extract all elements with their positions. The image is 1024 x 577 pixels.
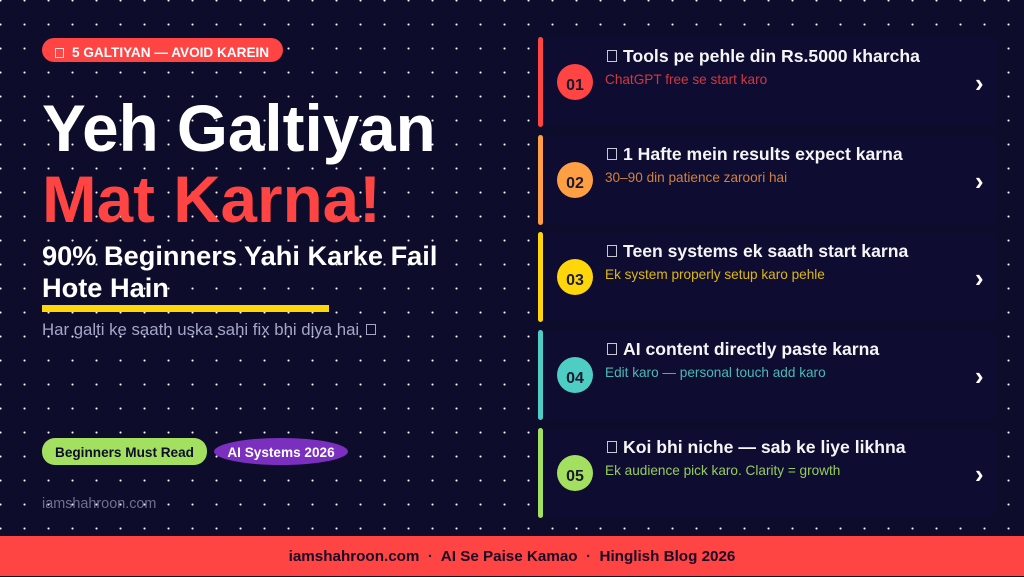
tag: AI Systems 2026: AI Systems 2026 [227,445,335,460]
yellow underline [42,305,329,312]
icon placeholder [607,441,617,453]
number badge: 04 [566,370,584,387]
fix text: Ek system properly setup karo pehle [605,267,825,282]
accent bar [538,232,543,322]
subheading: 90% Beginners Yahi Karke Fail Hote Hain [42,240,437,303]
chevron: › [975,70,984,98]
icon placeholder [607,50,617,62]
chevron: › [975,265,984,293]
mistake title: 1 Hafte mein results expect karna [623,144,903,164]
number badge [557,64,593,100]
number badge [557,259,593,295]
card 04 [538,330,986,420]
heading: Mat Karna: Mat Karna! [42,163,381,236]
tag: Beginners Must Read: Beginners Must Read [55,445,194,460]
icon placeholder [607,245,617,257]
number badge [557,357,593,393]
card 03 [538,232,986,322]
mistake title: Teen systems ek saath start karna [623,241,908,261]
icon placeholder [607,148,617,160]
card 02 [538,135,986,225]
chevron: › [975,461,984,489]
fix text: ChatGPT free se start karo [605,72,767,87]
number badge [557,162,593,198]
tag: Beginners Must Read [42,438,207,465]
badge: 5 galtiyan [42,38,283,62]
fix text: 30–90 din patience zaroori hai [605,170,787,185]
card 01 [538,37,986,127]
number badge: 01 [566,77,584,94]
number badge: 03 [566,272,584,289]
fix text: Ek audience pick karo. Clarity = growth [605,463,840,478]
accent bar [538,37,543,127]
chevron: › [975,363,984,391]
heading: Yeh Galtiyan: Yeh Galtiyan [42,92,436,165]
mistake title: Koi bhi niche — sab ke liye likhna [623,437,906,457]
badge: 5 galtiyan: 5 GALTIYAN — AVOID KAREIN [72,45,269,60]
accent bar [538,330,543,420]
website text: iamshahroon.com [42,496,156,512]
footer bar [0,536,1024,576]
number badge [557,455,593,491]
footer bar: iamshahroon.com · AI Se Paise Kamao · Hinglish Blog 2026 [289,548,735,565]
mistake title: Tools pe pehle din Rs.5000 kharcha [623,46,920,66]
number badge: 05 [566,468,584,485]
accent bar [538,135,543,225]
icon placeholder [607,343,617,355]
chevron: › [975,168,984,196]
number badge: 02 [566,175,584,192]
tag: AI Systems 2026 [214,438,348,465]
mistake title: AI content directly paste karna [623,339,879,359]
accent bar [538,428,543,518]
fix text: Edit karo — personal touch add karo [605,365,826,380]
card 05 [538,428,986,518]
tagline: Har galti ke saath uska sahi fix bhi diya hai [42,320,359,339]
